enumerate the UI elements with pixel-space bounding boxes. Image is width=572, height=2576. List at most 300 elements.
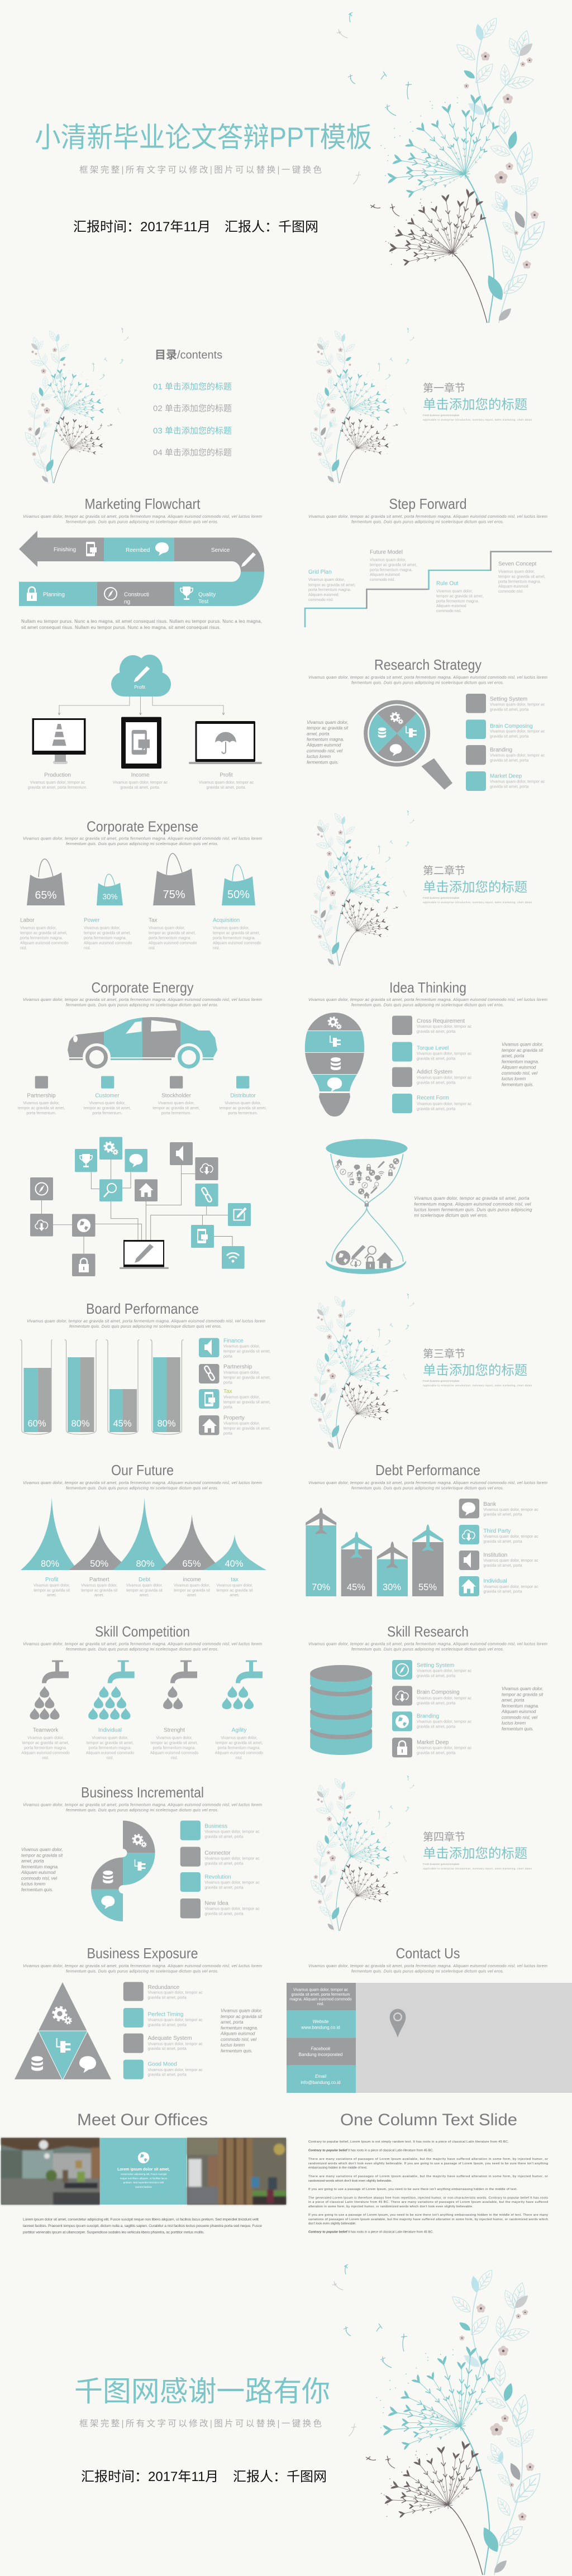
card: perfect timing: gravida sit amet, porta	[147, 2023, 187, 2028]
contact rows: www.bandung.co.id	[301, 2025, 340, 2030]
chapter title: 单击添加您的标题	[423, 880, 527, 894]
intro text: fermentum quis. Duis quis purus adipiscing mi scelerisque dictum quis vel eros.	[66, 1002, 218, 1008]
card: branding: Branding	[490, 747, 512, 753]
office photo left	[1, 2138, 100, 2205]
device: laptop	[189, 721, 262, 764]
percent labels: 80%	[136, 1559, 155, 1569]
card: revolution: gravida sit amet, porta	[204, 1886, 244, 1890]
bag: 30%: 30%	[102, 893, 118, 901]
legend: distributor: Vivamus quam dolor,	[225, 1101, 261, 1105]
bar: 45%: 45%	[347, 1582, 365, 1592]
column: agility: Vivamus quam dolor,	[221, 1736, 258, 1740]
legend: stockholder: Vivamus quam dolor,	[158, 1101, 194, 1105]
contents list: 04 单击添加您的标题	[153, 448, 232, 457]
card: business: Vivamus quam dolor, tempor ac	[204, 1830, 260, 1834]
card: recent form: gravida sit amet, porta	[417, 1107, 455, 1112]
card: partnership: porta	[223, 1381, 232, 1385]
tile: phone	[191, 1225, 214, 1248]
subtitle: 框架完整|所有文字可以修改|图片可以替换|一键换色	[79, 2418, 322, 2429]
intro text: fermentum quis. Duis quis purus adipiscing mi scelerisque dictum quis vel eros.	[351, 1486, 504, 1490]
card: redundance	[123, 1982, 203, 2001]
icons in lower bulb	[336, 1245, 393, 1269]
laptop	[120, 1240, 169, 1269]
panel: board performance	[20, 1300, 270, 1435]
card: individual: Individual	[483, 1578, 507, 1584]
step: future model: Aliquam euismod	[370, 573, 400, 577]
card: brain composing: gravida sit amet, porta	[417, 1701, 455, 1706]
footer text: sit amet consequat risus. Nullam eu tempor purus. Nunc a leo magna, sit amet consequat risus.	[21, 625, 221, 630]
chapter note: Applicable to enterprise introduction, summary report, sales marketing, chart datas	[423, 418, 532, 421]
icon: speech bubble	[155, 542, 169, 556]
card: brain composing: Vivamus quam dolor, tempor ac	[417, 1697, 472, 1700]
bag: 50%	[222, 865, 255, 905]
tile: wifi	[222, 1246, 245, 1269]
legend: distributor: tempor ac gravida sit amet,	[220, 1106, 266, 1110]
legend: customer: porta fermentum.	[92, 1112, 122, 1115]
side text: luctus lorem	[502, 1076, 526, 1081]
panel: icon network	[30, 1137, 251, 1276]
column: partnert: tempor ac gravida sit	[81, 1588, 117, 1592]
caption: income: Vivamus quam dolor, tempor ac	[113, 781, 168, 785]
illustration: dandelion	[308, 328, 414, 483]
car	[68, 1017, 217, 1068]
report date and presenter: 汇报人：千图网	[225, 220, 318, 235]
column: profit: Profit	[45, 1577, 59, 1583]
light bulb	[303, 1010, 367, 1117]
card: good mood	[123, 2060, 203, 2079]
panel: idea thinking	[303, 979, 547, 1117]
body copy: variations of passages of Lorem Ipsum available, but the majority have suffered alteration in some form, by injected humor, or randomized words which	[308, 2218, 548, 2221]
side text: tempor ac gravida sit	[221, 2014, 263, 2019]
column: acquisition: Aliquam euismod commodo	[213, 942, 261, 945]
card: redundance: Vivamus quam dolor, tempor ac	[147, 1991, 203, 1995]
chapter note: Fresh business general template	[423, 1863, 460, 1866]
legend: customer: Vivamus quam dolor,	[89, 1101, 126, 1105]
side text: commodo nisl, vel	[502, 1715, 537, 1720]
card: addict system: Addict System	[417, 1069, 452, 1075]
chapter title: 单击添加您的标题	[423, 397, 527, 412]
side text: fermentum quis.	[502, 1726, 533, 1731]
icon: umbrella	[215, 732, 236, 753]
intro text: fermentum quis. Duis quis purus adipiscing mi scelerisque dictum quis vel eros.	[351, 519, 504, 524]
card: bank: gravida sit amet, porta	[483, 1513, 522, 1517]
chapter note: Applicable to enterprise introduction, summary report, sales marketing, chart datas	[423, 1867, 532, 1870]
faucet: individual	[108, 1660, 135, 1683]
body copy: If you are going to use a passage of Lorem Ipsum, you need to be sure there isn't anything embarrassing hidden in the middle of text. There are many	[308, 2214, 548, 2217]
contents list: 01 单击添加您的标题	[153, 382, 232, 392]
card: revolution: Revolution	[204, 1874, 231, 1880]
card: perfect timing	[123, 2008, 203, 2028]
card: tax: tempor ac gravida sit amet,	[223, 1401, 270, 1404]
column: strength: Strenght	[164, 1727, 185, 1734]
chapter label: 第二章节	[423, 865, 465, 877]
step: future model: commodo nisl.	[370, 578, 395, 582]
column: teamwork: tempor ac gravida sit amet,	[22, 1742, 69, 1745]
card: branding	[392, 1711, 472, 1731]
panel: debt performance	[306, 1462, 547, 1596]
column: partnert: Vivamus quam dolor,	[81, 1584, 117, 1587]
caption: income: gravida sit amet, porta.	[120, 786, 160, 790]
illustration: dandelion	[308, 810, 414, 966]
column: power: Aliquam euismod commodo	[84, 942, 132, 945]
bag: 75%	[153, 853, 196, 905]
column: debt: amet.	[140, 1594, 149, 1597]
closing title: 千图网感谢一路有你	[74, 2375, 330, 2407]
legend: partnership	[18, 1076, 65, 1115]
column: debt: tempor ac gravida sit	[126, 1588, 163, 1592]
description text: luctus lorem fermentum quis. Duis quis purus adipiscing	[414, 1208, 532, 1213]
panel: research strategy	[306, 656, 547, 791]
teal info block: neque non libero aliquam, ut facilisis lacus	[120, 2177, 168, 2179]
card: good mood: Good Mood	[147, 2061, 177, 2068]
panel: cloud and devices	[28, 655, 262, 790]
legend: stockholder: tempor ac gravida sit amet,	[152, 1106, 200, 1110]
side text: amet, porta	[307, 732, 330, 736]
card: setting system: Vivamus quam dolor, tempor ac	[417, 1669, 472, 1673]
tile: cloud download	[30, 1214, 53, 1237]
office description: laoreet facilisis. Praesent tempus ipsum suscipit, dictum nulla a, sagittis sapien. Curabitur a nisl facilisis lectus posuere pharetra porta sed neque. Fusce	[23, 2224, 262, 2228]
bar: 30%: 30%	[383, 1582, 401, 1592]
step labels: Constructi	[124, 592, 149, 598]
panel: one column text slide	[308, 2111, 549, 2234]
intro text: Vivamus quam dolor, tempor ac gravida sit amet, porta fermentum magna. Aliquam euismod commodo nisl, vel luctus lorem	[308, 675, 547, 680]
card: partnership: Partnership	[223, 1364, 252, 1370]
card: bank: Vivamus quam dolor, tempor ac	[483, 1508, 538, 1512]
body copy: Contrary to popular belief It has roots in a piece of classical Latin literature from 45 BC.	[308, 2231, 433, 2234]
card: third party: Third Party	[483, 1528, 511, 1534]
arrow flow shape	[19, 531, 264, 606]
legend: distributor: porta fermentum.	[228, 1112, 258, 1115]
contact rows: Bandung incorporated	[299, 2052, 342, 2057]
card: bank: Bank	[483, 1501, 497, 1508]
panel: contact us	[287, 1945, 572, 2093]
card: redundance: Redundance	[147, 1985, 180, 1991]
column: tax: Aliquam euismod commodo	[149, 942, 197, 945]
column: labor: nisl.	[20, 946, 27, 951]
staircase line	[305, 552, 552, 627]
connector lines	[41, 1160, 232, 1254]
body copy: embarrassing hidden in the middle of text.	[308, 2166, 368, 2169]
card: partnership	[199, 1364, 270, 1385]
tile: compass	[30, 1177, 53, 1200]
bag: 65%	[27, 859, 65, 905]
card: market deep: Market Deep	[417, 1739, 449, 1746]
column: income: income	[183, 1577, 201, 1583]
contact rows: info@bandung.co.id	[301, 2080, 341, 2085]
side text: tempor ac gravida sit	[502, 1692, 544, 1697]
column: income: amet.	[187, 1594, 197, 1597]
icon: database	[378, 727, 386, 738]
step: seven concept: Aliquam euismod	[498, 585, 528, 589]
column: power: Vivamus quam dolor,	[84, 926, 120, 931]
card: brain composing: Brain Composing	[417, 1689, 460, 1696]
illustration: dandelion	[308, 1294, 414, 1449]
card: branding: gravida sit amet, porta	[490, 759, 528, 763]
body copy: alteration in some form, by injected humor, or randomized words which don't look even slightly believable.	[308, 2205, 473, 2208]
column: profit: tempor ac gravida sit	[34, 1588, 70, 1592]
heading: Research Strategy	[374, 656, 482, 673]
column: teamwork: nisl.	[42, 1756, 49, 1761]
bar: 45%	[341, 1532, 372, 1596]
step: rule out: Aliquam euismod	[436, 604, 466, 608]
drops: individual	[88, 1686, 131, 1719]
side text: fermentum magna.	[21, 1864, 59, 1869]
intro text: fermentum quis. Duis quis purus adipiscing mi scelerisque dictum quis vel eros.	[66, 1807, 218, 1812]
card: brain composing	[392, 1686, 472, 1706]
side text: commodo nisl, vel	[307, 748, 342, 753]
intro text: Vivamus quam dolor, tempor ac gravida sit amet, porta fermentum magna. Aliquam euismod commodo nisl, vel luctus lorem	[308, 1963, 547, 1968]
step: future model: Vivamus quam dolor,	[370, 559, 406, 562]
step labels: ng	[124, 599, 130, 605]
card: connector: Connector	[204, 1850, 231, 1857]
connector arrows	[58, 697, 225, 715]
tube: 60%: 60%	[27, 1419, 46, 1429]
step: grid plan: Aliquam euismod	[308, 593, 339, 597]
icon: pencil	[134, 666, 150, 682]
tile: globe	[72, 1214, 95, 1237]
column: debt: Debt	[139, 1577, 150, 1583]
description text: Vivamus quam dolor, tempor ac gravida sit amet, porta	[414, 1196, 530, 1201]
side text: Aliquam euismod	[501, 1065, 536, 1070]
tile: chain	[195, 1184, 218, 1206]
icon: speech bubble	[79, 2056, 96, 2073]
device: tablet	[121, 717, 161, 769]
subtitle: 框架完整|所有文字可以修改|图片可以替换|一键换色	[79, 165, 322, 175]
card: adequate system	[123, 2034, 203, 2053]
side text: tempor ac gravida sit	[502, 1048, 544, 1053]
side text: fermentum magna.	[307, 737, 344, 742]
card: brain composing: Brain Composing	[490, 723, 533, 729]
card: setting system: Setting System	[417, 1662, 454, 1669]
panel: chapter four	[308, 1776, 532, 1931]
column: tax: amet.	[230, 1594, 240, 1597]
step: rule out: tempor ac gravida sit amet,	[436, 594, 483, 599]
panel: hourglass	[326, 1139, 532, 1274]
card: cross requirement: gravida sit amet, porta	[417, 1030, 455, 1034]
icon: plug	[330, 1036, 341, 1047]
teal info block: laoreet facilisis	[135, 2186, 152, 2188]
step: rule out: porta fermentum magna.	[436, 600, 479, 603]
icon: speech bubble	[390, 744, 402, 756]
panel: meet our offices	[1, 2111, 286, 2234]
icon: gears	[133, 1835, 146, 1847]
legend: customer	[84, 1076, 131, 1115]
card: adequate system: Vivamus quam dolor, tempor ac	[147, 2042, 203, 2047]
panel: chapter three	[308, 1294, 532, 1449]
heading: Marketing Flowchart	[85, 495, 201, 512]
card: market deep: gravida sit amet, porta	[490, 785, 528, 789]
card: business: gravida sit amet, porta	[204, 1835, 244, 1839]
column: individual: porta fermentum magna.	[89, 1746, 131, 1750]
drops: strength	[163, 1686, 183, 1709]
body copy: Contrary to popular belief, Lorem Ipsum is not simply random text. It has roots in a piece of classical Latin literature from 45 BC.	[308, 2140, 509, 2144]
side text: fermentum quis.	[221, 2049, 252, 2053]
step: seven concept: Vivamus quam dolor,	[498, 570, 535, 574]
intro text: fermentum quis. Duis quis purus adipiscing mi scelerisque dictum quis vel eros.	[66, 1486, 218, 1490]
card: tax: Vivamus quam dolor,	[223, 1395, 260, 1400]
intro text: Vivamus quam dolor, tempor ac gravida sit amet, porta fermentum magna. Aliquam euismod commodo nisl, vel luctus lorem	[23, 836, 262, 841]
card: adequate system: gravida sit amet, porta	[147, 2047, 187, 2051]
column: individual: Aliquam euismod commodo	[86, 1752, 134, 1755]
card: finance	[199, 1338, 270, 1358]
card: torque level: Torque Level	[417, 1046, 449, 1051]
intro text: fermentum quis. Duis quis purus adipiscing mi scelerisque dictum quis vel eros.	[69, 1324, 222, 1329]
column: individual: tempor ac gravida sit amet,	[87, 1742, 134, 1745]
column: acquisition: nisl.	[213, 946, 220, 951]
heading: Our Future	[111, 1462, 174, 1478]
card: property: Vivamus quam dolor,	[223, 1422, 260, 1425]
column: strength: nisl.	[171, 1756, 178, 1761]
step: grid plan: commodo nisl.	[308, 598, 333, 602]
intro text: fermentum quis. Duis quis purus adipiscing mi scelerisque dictum quis vel eros.	[66, 1647, 218, 1652]
heading: Business Exposure	[87, 1945, 198, 1962]
column: agility: tempor ac gravida sit amet,	[216, 1742, 263, 1745]
intro text: Vivamus quam dolor, tempor ac gravida sit amet, porta fermentum magna. Aliquam euismod commodo nisl, vel luctus lorem	[23, 1802, 262, 1807]
bar: 30%	[377, 1542, 408, 1596]
card: property: porta	[223, 1432, 232, 1435]
body copy: randomized words which don't look even slightly believable.	[308, 2179, 392, 2183]
icon: gears	[391, 713, 403, 724]
side text: amet, porta	[502, 1698, 525, 1702]
column: income: Vivamus quam dolor,	[174, 1584, 210, 1587]
heading: Corporate Expense	[87, 818, 198, 834]
card: bank	[459, 1499, 538, 1518]
column: strength: tempor ac gravida sit amet,	[151, 1742, 198, 1745]
card: finance: porta	[223, 1355, 232, 1358]
report date and presenter: 汇报时间：2017年11月	[73, 220, 211, 235]
column: tax: nisl.	[149, 946, 156, 951]
column: agility: Agility	[232, 1727, 246, 1734]
card: individual	[459, 1576, 538, 1596]
panel: chapter two	[308, 810, 532, 966]
icon: database	[103, 1871, 113, 1883]
step: seven concept: tempor ac gravida sit amet,	[498, 575, 545, 579]
column: teamwork: Teamwork	[33, 1727, 59, 1734]
report date and presenter: 汇报人：千图网	[233, 2469, 327, 2484]
percent labels: 80%	[41, 1559, 59, 1569]
column: agility: Aliquam euismod commodo	[215, 1752, 263, 1755]
card: setting system: Setting System	[490, 696, 527, 703]
side text: Aliquam euismod	[21, 1870, 56, 1875]
card: branding: Branding	[417, 1714, 439, 1719]
column: power: nisl.	[84, 946, 91, 951]
bar: 55%: 55%	[418, 1582, 437, 1592]
percent labels: 50%	[90, 1559, 109, 1569]
card: setting system: gravida sit amet, porta	[417, 1675, 455, 1678]
percent labels: 65%	[182, 1559, 201, 1569]
card: connector: Vivamus quam dolor, tempor ac	[204, 1857, 260, 1861]
body copy: There are many variations of passages of Lorem Ipsum available, but the majority have suffered alteration in some form, by injected humor, or	[308, 2175, 548, 2178]
column: individual: Individual	[98, 1727, 122, 1734]
card: market deep: Vivamus quam dolor, tempor ac	[417, 1746, 472, 1750]
card: property: tempor ac gravida sit amet,	[223, 1427, 270, 1431]
legend: partnership: porta fermentum.	[26, 1112, 56, 1115]
card: connector	[180, 1847, 260, 1867]
card: institution: Institution	[483, 1552, 507, 1558]
card: good mood: Vivamus quam dolor, tempor ac	[147, 2068, 203, 2072]
card: good mood: gravida sit amet, porta	[147, 2073, 187, 2077]
chapter note: Fresh business general template	[423, 414, 460, 417]
card: brain composing: Vivamus quam dolor, tempor ac	[490, 729, 545, 734]
side text: luctus lorem	[221, 2043, 245, 2048]
tube: 60%	[20, 1339, 53, 1434]
contact rows	[287, 1983, 356, 2093]
column: partnert: amet.	[94, 1594, 104, 1597]
step: rule out: commodo nisl.	[436, 609, 461, 613]
card: addict system: gravida sit amet, porta	[417, 1081, 455, 1085]
contents heading: 目录/contents	[155, 349, 222, 361]
column: strength: porta fermentum magna.	[153, 1746, 196, 1750]
map placeholder	[356, 1983, 572, 2093]
intro text: fermentum quis. Duis quis purus adipiscing mi scelerisque dictum quis vel eros.	[351, 1647, 504, 1652]
panel: cover	[35, 12, 550, 323]
illustration: dandelion plant	[332, 2264, 546, 2575]
chapter note: Fresh business general template	[423, 896, 460, 899]
icon: gears	[328, 1017, 341, 1029]
step labels: Finishing	[54, 547, 76, 553]
S-shaped segments	[91, 1821, 155, 1921]
panel: skill research	[308, 1623, 547, 1757]
description text: fermentum magna. Aliquam euismod commodo nisl, vel	[414, 1201, 531, 1206]
card: individual: Vivamus quam dolor, tempor ac	[483, 1585, 538, 1589]
title: 小清新毕业论文答辩PPT模板	[35, 122, 372, 153]
icon: database	[331, 1057, 341, 1070]
intro text: Vivamus quam dolor, tempor ac gravida sit amet, porta fermentum magna. Aliquam euismod commodo nisl, vel luctus lorem	[23, 1641, 262, 1647]
legend: distributor	[220, 1076, 266, 1115]
side text: tempor ac gravida sit	[21, 1853, 63, 1858]
tile: speaker	[170, 1142, 193, 1165]
step: grid plan: porta fermentum magna.	[308, 588, 351, 592]
column: teamwork: Aliquam euismod commodo	[21, 1752, 70, 1755]
card: tax	[199, 1389, 270, 1410]
icon: lock	[27, 587, 37, 601]
side text: Vivamus quam dolor,	[221, 2009, 263, 2013]
column: agility: porta fermentum magna.	[218, 1746, 260, 1750]
magnifier chart	[366, 702, 452, 790]
body copy: There are many variations of passages of Lorem Ipsum available, but the majority have suffered alteration in some form, by injected humor, or	[308, 2158, 548, 2161]
card: market deep: Vivamus quam dolor, tempor ac	[490, 780, 545, 784]
card: setting system	[466, 694, 545, 713]
bar: 55%	[412, 1524, 444, 1596]
card: tax: Tax	[223, 1389, 232, 1395]
chapter title: 单击添加您的标题	[423, 1363, 527, 1377]
side text: fermentum quis.	[502, 1082, 533, 1087]
caption: production: Vivamus quam dolor, tempor ac	[30, 781, 85, 785]
triangle diagram	[15, 1982, 111, 2079]
column: profit: amet.	[47, 1594, 57, 1597]
panel: closing cover	[74, 2264, 546, 2575]
illustration: dandelion	[22, 328, 129, 483]
column: tax: tempor ac gravida sit	[217, 1588, 253, 1592]
step: rule out: Rule Out	[436, 581, 459, 586]
card: brain composing	[466, 719, 545, 739]
intro text: Vivamus quam dolor, tempor ac gravida sit amet, porta fermentum magna. Aliquam euismod commodo nisl, vel luctus lorem	[27, 1318, 265, 1324]
side text: Vivamus quam dolor,	[21, 1847, 63, 1852]
side text: Vivamus quam dolor,	[502, 1042, 544, 1047]
body copy: If you are going to use a passage of Lorem Ipsum, you need to be sure there isn't anything embarrassing hidden in the middle of text.	[308, 2188, 517, 2191]
column: power: Power	[84, 917, 100, 924]
side text: fermentum quis.	[21, 1887, 53, 1892]
card: cross requirement: Vivamus quam dolor, tempor ac	[417, 1025, 472, 1029]
contact rows: Website	[313, 2019, 329, 2024]
card: addict system	[392, 1067, 472, 1087]
contact rows: nisl.	[317, 2002, 324, 2006]
cloud label: Profit	[134, 684, 146, 690]
contact rows: Vivamus quam dolor, tempor ac	[293, 1988, 349, 1992]
side text: commodo nisl, vel	[502, 1071, 537, 1076]
card: connector: gravida sit amet, porta	[204, 1862, 244, 1866]
body copy: Contrary to popular belief It has roots in a piece of classical Latin literature from 45 BC.	[308, 2149, 433, 2153]
